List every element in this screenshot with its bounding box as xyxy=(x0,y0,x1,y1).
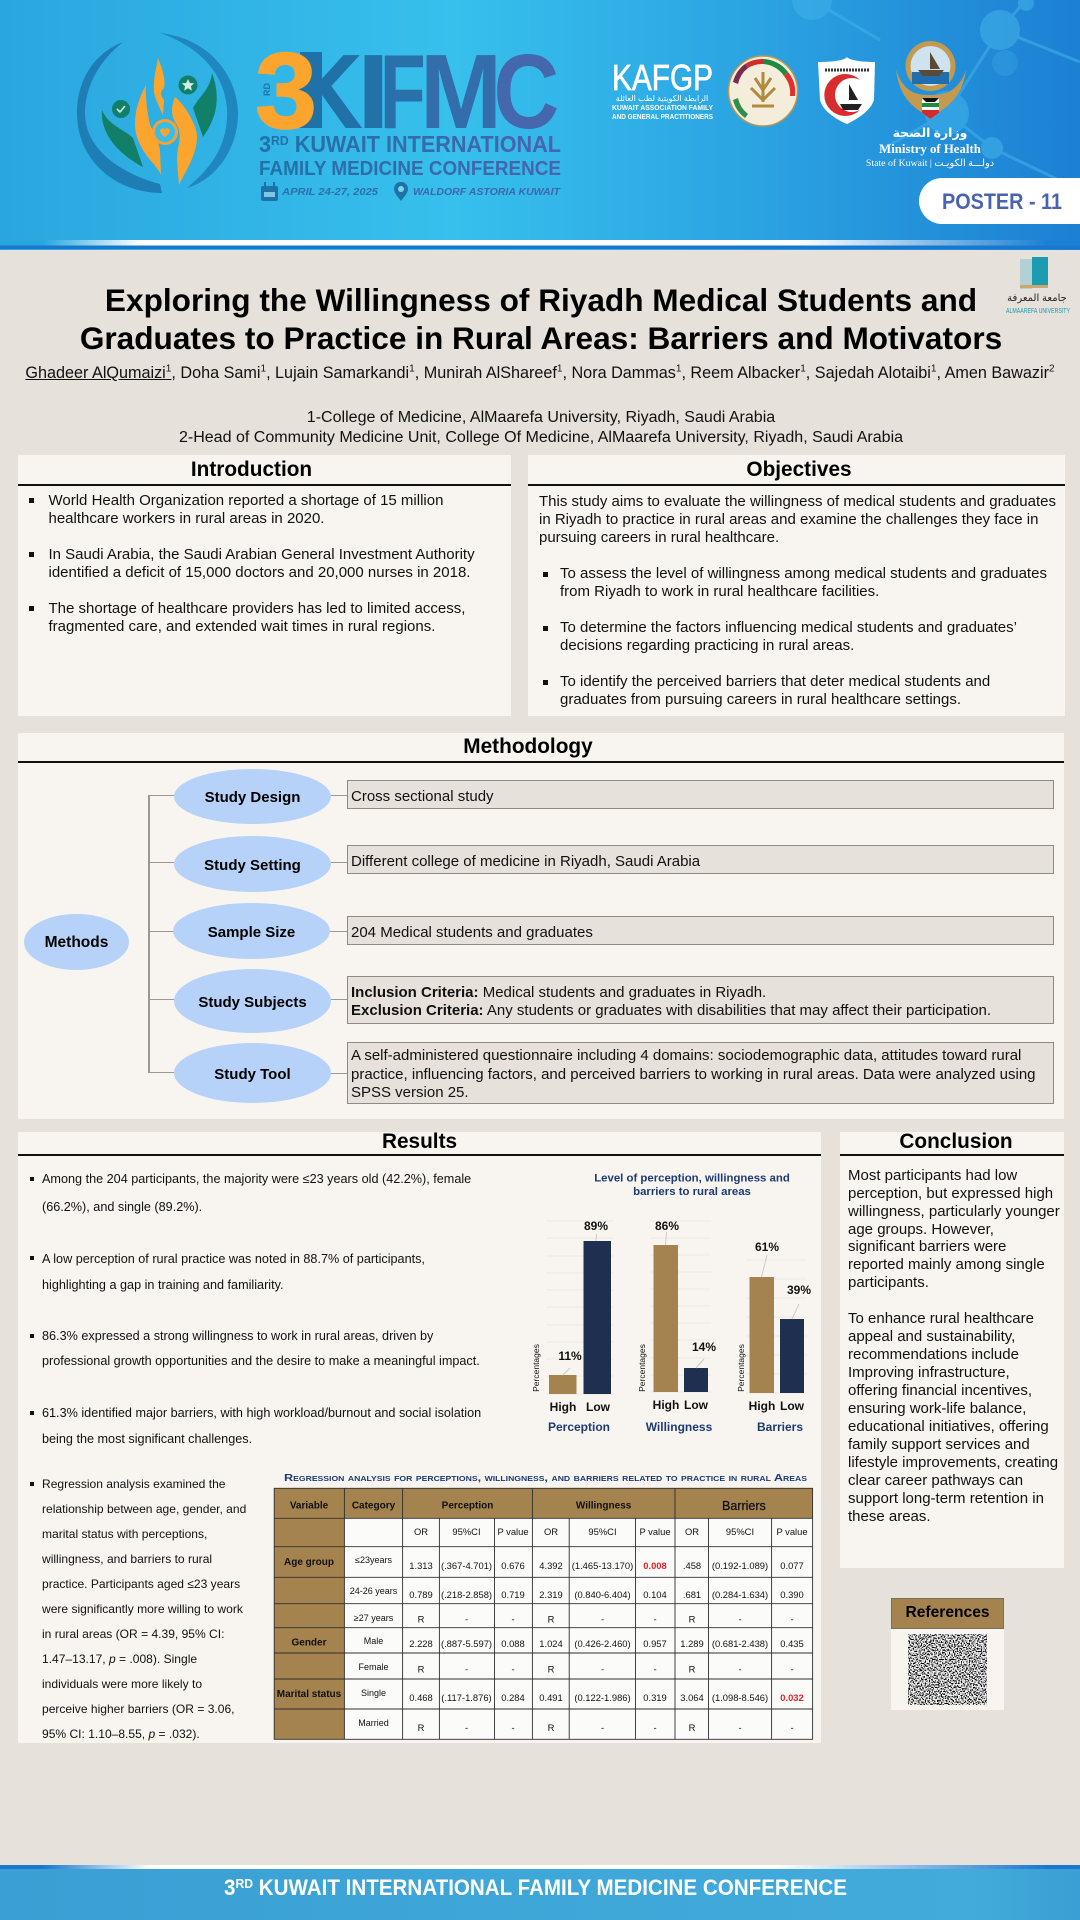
table values: (0.426-2.460) xyxy=(574,1638,631,1649)
table values: - xyxy=(601,1722,604,1733)
table values: 0.676 xyxy=(501,1560,525,1571)
node: study design: Study Design xyxy=(205,789,300,806)
text block: conclusion: family support services and xyxy=(848,1436,1030,1453)
box: study tool xyxy=(347,1042,1054,1104)
conference name xyxy=(259,131,561,180)
box: study design xyxy=(347,780,1054,809)
box: study subjects xyxy=(347,976,1054,1024)
text block: conclusion: educational initiatives, offering xyxy=(848,1418,1049,1435)
chart title: barriers to rural areas xyxy=(633,1186,751,1198)
bar chart: perception, willingness, barriers xyxy=(531,1172,811,1434)
table values: (.887-5.597) xyxy=(441,1638,492,1649)
row labels: Age group xyxy=(284,1557,334,1568)
table values: - xyxy=(601,1664,604,1674)
group: barriers bars: Percentages xyxy=(736,1344,746,1392)
network decoration xyxy=(792,0,1080,190)
table values: 0.468 xyxy=(409,1692,433,1703)
group: perception bars: High xyxy=(550,1400,576,1414)
node: study setting: Study Setting xyxy=(204,856,301,874)
node: study subjects xyxy=(174,969,331,1033)
category labels: ≤23years xyxy=(355,1555,392,1565)
text block: regression summary: in rural areas (OR = 4.39, 95% CI: xyxy=(42,1627,224,1641)
text block: objectives aim and bullets: To identify the perceived barriers that deter medical students and xyxy=(560,673,990,690)
table values: 95%CI xyxy=(588,1526,617,1537)
text block: introduction bullets: World Health Organization reported a shortage of 15 million xyxy=(48,492,443,508)
conference name: RD xyxy=(271,133,289,148)
conference logo mark xyxy=(77,33,238,193)
heading: introduction: Introduction xyxy=(191,458,312,481)
conference wordmark 3 KIFMC: C xyxy=(493,33,559,151)
table values: - xyxy=(511,1614,515,1624)
table values: - xyxy=(601,1614,604,1624)
group: willingness bars: Willingness xyxy=(646,1420,713,1434)
conference name: KUWAIT INTERNATIONAL xyxy=(289,131,561,157)
node: study design xyxy=(174,769,331,824)
table values: (.367-4.701) xyxy=(441,1560,492,1571)
KAFGP logo: KAFGP xyxy=(612,57,713,98)
text block: conclusion: participants. xyxy=(848,1274,929,1291)
text block: results bullets: 61.3% identified major barriers, with high workload/burnout and social isolation xyxy=(42,1406,481,1420)
circular society logo xyxy=(728,56,798,126)
text block: regression summary: willingness, and barriers to rural xyxy=(42,1552,212,1566)
footer title: RD xyxy=(235,1876,253,1891)
text block: introduction bullets: healthcare workers in rural areas in 2020. xyxy=(48,510,324,526)
authors: Ghadeer AlQumaizi1, Doha Sami1, Lujain Samarkandi1, Munirah AlShareef1, Nora Dammas1, Reem Albacker1, Sajedah Alotaibi1, Amen Bawazir2 xyxy=(25,364,1055,382)
node: study tool xyxy=(174,1043,331,1103)
table values: 1.289 xyxy=(680,1638,704,1649)
text block: conclusion: To enhance rural healthcare xyxy=(848,1310,1034,1327)
table values: R xyxy=(418,1664,425,1674)
text block: conclusion: lifestyle improvements, creating xyxy=(848,1454,1058,1471)
table values: R xyxy=(689,1664,696,1674)
text block: introduction bullets: identified a deficit of 15,000 doctors and 20,000 nurses in 2018. xyxy=(48,564,470,580)
group: willingness bars: High xyxy=(653,1398,679,1412)
table values: 0.284 xyxy=(501,1692,525,1703)
table values: 95%CI xyxy=(726,1526,754,1537)
table values: R xyxy=(548,1722,555,1733)
node: study setting xyxy=(174,836,331,892)
table values: (1.098-8.546) xyxy=(712,1692,768,1703)
table values: R xyxy=(689,1722,696,1733)
text block: results bullets: being the most significant challenges. xyxy=(42,1432,252,1446)
table values: .681 xyxy=(683,1589,701,1600)
table values: - xyxy=(653,1664,657,1674)
heading: references: References xyxy=(905,1604,990,1621)
table values: R xyxy=(418,1722,425,1733)
panel: conclusion xyxy=(840,1132,1064,1568)
conference wordmark 3 KIFMC: I xyxy=(356,33,390,151)
table values: - xyxy=(738,1614,742,1624)
text block: regression summary: relationship between age, gender, and xyxy=(42,1502,246,1516)
university logo xyxy=(1006,257,1070,315)
text block: conclusion: willingness, particularly younger xyxy=(848,1203,1060,1220)
group: barriers bars: 61% xyxy=(755,1240,779,1254)
table values: R xyxy=(689,1614,696,1624)
group: perception bars: Percentages xyxy=(531,1344,541,1392)
table values: P value xyxy=(776,1526,808,1537)
table values: OR xyxy=(414,1526,428,1537)
heading: results: Results xyxy=(382,1130,457,1153)
table values: 0.032 xyxy=(780,1692,804,1703)
conference wordmark 3 KIFMC: RD xyxy=(262,83,272,96)
table values: 0.077 xyxy=(780,1560,804,1571)
text block: objectives aim and bullets: from Riyadh to work in rural healthcare facilities. xyxy=(560,583,879,600)
title: Exploring the Willingness of Riyadh Medical Students and xyxy=(105,282,977,318)
poster number pill xyxy=(919,178,1080,224)
group: perception bars: Low xyxy=(586,1400,611,1414)
group: willingness bars: Low xyxy=(684,1398,709,1412)
icon: QR code xyxy=(908,1634,987,1705)
table values: - xyxy=(511,1664,515,1674)
table header: Barriers xyxy=(722,1499,766,1513)
node: methods xyxy=(24,914,129,970)
table values: 2.319 xyxy=(539,1589,563,1600)
group: perception bars: Perception xyxy=(548,1420,610,1434)
table values: 0.104 xyxy=(643,1589,667,1600)
box: study subjects: Inclusion Criteria: Medical students and graduates in Riyadh. xyxy=(351,984,766,1000)
table values: (1.465-13.170) xyxy=(572,1560,633,1571)
table values: 0.008 xyxy=(643,1560,667,1571)
node: study subjects: Study Subjects xyxy=(198,994,307,1010)
table values: 1.024 xyxy=(539,1638,563,1649)
ministry of health text: State of Kuwait | دولـــة الكويـت xyxy=(866,158,994,169)
ministry of health text: Ministry of Health xyxy=(879,142,981,156)
affiliations: 1-College of Medicine, AlMaarefa University, Riyadh, Saudi Arabia xyxy=(307,408,775,426)
regression table xyxy=(274,1473,814,1740)
row labels: Gender xyxy=(291,1638,327,1648)
table values: - xyxy=(653,1722,657,1733)
table values: (.117-1.876) xyxy=(441,1692,492,1703)
node: sample size: Sample Size xyxy=(208,924,295,940)
group: barriers bars: High xyxy=(749,1399,775,1413)
text block: results bullets xyxy=(30,1172,481,1446)
table values: - xyxy=(511,1722,515,1733)
table values: P value xyxy=(497,1526,529,1537)
table header: Willingness xyxy=(576,1500,632,1512)
table values: - xyxy=(790,1614,794,1624)
table values: 1.313 xyxy=(409,1560,433,1571)
text block: results bullets: 86.3% expressed a strong willingness to work in rural areas, driven by xyxy=(42,1329,433,1343)
text block: conclusion: ensuring work-life balance, xyxy=(848,1400,1026,1417)
heading: references xyxy=(891,1598,1004,1629)
table values: 2.228 xyxy=(409,1638,433,1649)
table values: (.218-2.858) xyxy=(441,1589,492,1600)
text block: results bullets: Among the 204 participants, the majority were ≤23 years old (42.2%), female xyxy=(42,1172,471,1186)
table values: R xyxy=(548,1664,555,1674)
table header: Variable xyxy=(290,1500,329,1512)
text block: introduction bullets: The shortage of healthcare providers has led to limited access, xyxy=(48,600,465,616)
KAFGP logo: AND GENERAL PRACTITIONERS xyxy=(612,112,713,121)
box: study tool: A self-administered questionnaire including 4 domains: sociodemographic data, attitudes toward rural xyxy=(351,1047,1021,1064)
box: sample size: 204 Medical students and graduates xyxy=(351,924,593,941)
text block: objectives aim and bullets: decisions regarding practicing in rural areas. xyxy=(560,637,854,654)
table values: - xyxy=(465,1722,468,1733)
box: study design: Cross sectional study xyxy=(351,788,494,804)
table values: - xyxy=(738,1664,742,1674)
category labels: Married xyxy=(358,1718,389,1728)
category labels: Female xyxy=(358,1662,389,1672)
affiliations: 2-Head of Community Medicine Unit, College Of Medicine, AlMaarefa University, Riyadh, Saudi Arabia xyxy=(179,428,903,446)
text block: introduction bullets: In Saudi Arabia, the Saudi Arabian General Investment Authority xyxy=(48,546,475,562)
text block: objectives aim and bullets: This study aims to evaluate the willingness of medical students and graduates xyxy=(539,493,1056,510)
table values: 3.064 xyxy=(680,1692,704,1703)
table values: - xyxy=(465,1664,468,1674)
conference name: FAMILY MEDICINE CONFERENCE xyxy=(259,158,561,180)
text block: regression summary: individuals were more likely to xyxy=(42,1677,202,1691)
table values: - xyxy=(465,1614,468,1624)
panel: methodology xyxy=(18,733,1064,1119)
table values: 0.491 xyxy=(539,1692,563,1703)
table values: - xyxy=(738,1722,742,1733)
table values: - xyxy=(790,1722,794,1733)
conference wordmark 3 KIFMC: 3 xyxy=(255,30,317,151)
text block: results bullets: professional growth opportunities and the desire to make a meaningful impact. xyxy=(42,1354,480,1368)
conference wordmark 3 KIFMC: F xyxy=(380,33,426,151)
table values: (0.284-1.634) xyxy=(712,1589,768,1600)
box: sample size xyxy=(347,916,1054,945)
footer title: 3 xyxy=(224,1875,236,1900)
title xyxy=(80,282,1002,356)
heading: conclusion: Conclusion xyxy=(899,1130,1013,1153)
text block: conclusion xyxy=(848,1167,1060,1525)
text block: regression summary xyxy=(30,1477,246,1741)
Kuwait emblem xyxy=(896,41,966,119)
text block: results bullets: A low perception of rural practice was noted in 88.7% of participants, xyxy=(42,1252,425,1266)
group: willingness bars: Percentages xyxy=(637,1344,647,1392)
table values: P value xyxy=(639,1526,671,1537)
group: willingness bars xyxy=(637,1219,716,1434)
table values: 0.789 xyxy=(409,1589,433,1600)
text block: conclusion: reported mainly among single xyxy=(848,1256,1045,1273)
table values: (0.122-1.986) xyxy=(574,1692,631,1703)
header banner xyxy=(0,0,1080,250)
text block: introduction bullets xyxy=(29,492,475,634)
text block: conclusion: support long-term retention in xyxy=(848,1490,1044,1507)
table values: R xyxy=(548,1614,555,1624)
footer banner xyxy=(0,1865,1080,1920)
text block: results bullets: highlighting a gap in training and familiarity. xyxy=(42,1278,284,1292)
conference wordmark 3 KIFMC: M xyxy=(420,33,502,151)
date and venue xyxy=(261,182,562,201)
text block: regression summary: marital status with perceptions, xyxy=(42,1527,207,1541)
group: barriers bars: Low xyxy=(780,1399,805,1413)
ministry of health text xyxy=(866,126,994,169)
node: methods: Methods xyxy=(45,934,108,951)
text block: regression summary: Regression analysis examined the xyxy=(42,1477,225,1491)
table values xyxy=(409,1526,808,1733)
group: perception bars: 89% xyxy=(584,1219,608,1233)
table title: Regression analysis for perceptions, willingness, and barriers related to practice in rural Areas xyxy=(284,1473,807,1484)
text block: regression summary: 95% CI: 1.10–8.55, p = .032). xyxy=(42,1727,200,1741)
row labels xyxy=(277,1557,342,1700)
ministry of health text: وزارة الصحة xyxy=(893,126,967,140)
group: willingness bars: 86% xyxy=(655,1219,679,1233)
conference name: 3 xyxy=(259,131,272,157)
text block: regression summary: 1.47–13.17, p = .008). Single xyxy=(42,1652,197,1666)
category labels: Male xyxy=(364,1636,383,1646)
poster number pill: POSTER - 11 xyxy=(942,189,1062,214)
category labels: Single xyxy=(361,1688,386,1698)
group: barriers bars: Barriers xyxy=(757,1420,803,1434)
KAFGP logo: الرابطة الكويتية لطب العائلة xyxy=(616,94,708,103)
node: study tool: Study Tool xyxy=(214,1066,291,1082)
affiliations xyxy=(179,408,904,446)
table values: OR xyxy=(685,1526,699,1537)
category labels: 24-26 years xyxy=(350,1586,398,1596)
chart title: Level of perception, willingness and xyxy=(594,1172,790,1184)
group: perception bars xyxy=(531,1219,611,1434)
table values: 0.719 xyxy=(501,1589,525,1600)
text block: objectives aim and bullets: in Riyadh to practice in rural areas and examine the challenges they face in xyxy=(539,511,1038,528)
text block: conclusion: perception, but expressed high xyxy=(848,1185,1053,1202)
table values: - xyxy=(790,1664,794,1674)
text block: conclusion: Most participants had low xyxy=(848,1167,1017,1184)
table values: 95%CI xyxy=(452,1526,481,1537)
KAFGP logo xyxy=(612,57,713,121)
text block: regression summary: were significantly more willing to work xyxy=(42,1602,243,1616)
text block: objectives aim and bullets xyxy=(539,493,1056,708)
text block: conclusion: offering financial incentives, xyxy=(848,1382,1032,1399)
text block: conclusion: significant barriers were xyxy=(848,1238,1006,1255)
text block: objectives aim and bullets: graduates from pursuing careers in rural healthcare settings. xyxy=(560,691,961,708)
box: study tool: SPSS version 25. xyxy=(351,1084,469,1101)
text block: objectives aim and bullets: To assess the level of willingness among medical students and graduates xyxy=(560,565,1047,582)
row labels: Marital status xyxy=(277,1689,342,1700)
table values: R xyxy=(418,1614,425,1624)
panel: introduction xyxy=(18,455,511,716)
table values: 4.392 xyxy=(539,1560,563,1571)
table values: 0.957 xyxy=(643,1638,667,1649)
heading: methodology: Methodology xyxy=(463,735,593,758)
date and venue: APRIL 24-27, 2025 xyxy=(281,186,378,198)
text block: regression summary: perceive higher barriers (OR = 3.06, xyxy=(42,1702,235,1716)
group: willingness bars: 14% xyxy=(692,1340,716,1354)
box: study tool: practice, influencing factors, and perceived barriers to working in rural areas. Data were analyzed using xyxy=(351,1066,1036,1082)
box: study setting: Different college of medicine in Riyadh, Saudi Arabia xyxy=(351,853,700,870)
group: barriers bars xyxy=(736,1240,811,1434)
table values: (0.192-1.089) xyxy=(712,1560,768,1571)
date and venue: WALDORF ASTORIA KUWAIT xyxy=(413,186,562,198)
group: perception bars: 11% xyxy=(558,1349,582,1363)
table header xyxy=(290,1499,766,1513)
box: study subjects: Exclusion Criteria: Any students or graduates with disabilities that may affect their participation. xyxy=(351,1002,991,1018)
text block: introduction bullets: fragmented care, and extended wait times in rural regions. xyxy=(48,618,435,634)
category labels xyxy=(350,1555,398,1728)
table header: Perception xyxy=(442,1500,493,1512)
table values: 0.319 xyxy=(643,1692,667,1703)
table values: .458 xyxy=(683,1560,701,1571)
table header: Category xyxy=(352,1500,396,1512)
top strip xyxy=(0,240,1080,246)
category labels: ≥27 years xyxy=(354,1613,394,1623)
table values: 0.435 xyxy=(780,1638,804,1649)
table values: (0.681-2.438) xyxy=(712,1638,768,1649)
conference wordmark 3 KIFMC: K xyxy=(293,33,363,151)
text block: conclusion: Improving infrastructure, xyxy=(848,1364,1010,1381)
text block: conclusion: age groups. However, xyxy=(848,1221,994,1238)
methods diagram xyxy=(24,769,1054,1104)
panel: results xyxy=(18,1132,821,1743)
text block: conclusion: appeal and sustainability, xyxy=(848,1328,1015,1345)
text block: results bullets: (66.2%), and single (89.2%). xyxy=(42,1200,202,1214)
KAFGP logo: KUWAIT ASSOCIATION FAMILY xyxy=(612,103,713,112)
table values: - xyxy=(653,1614,657,1624)
conference wordmark 3 KIFMC xyxy=(255,30,559,151)
text block: conclusion: clear career pathways can xyxy=(848,1472,1023,1489)
text block: regression summary: practice. Participants aged ≤23 years xyxy=(42,1577,240,1591)
table values: 0.390 xyxy=(780,1589,804,1600)
shield logo xyxy=(818,57,875,124)
chart title xyxy=(594,1172,790,1198)
panel: objectives xyxy=(528,455,1065,716)
table values: 0.088 xyxy=(501,1638,525,1649)
heading: objectives: Objectives xyxy=(746,458,852,481)
panel: references xyxy=(891,1598,1004,1710)
table values: OR xyxy=(544,1526,558,1537)
box: study setting xyxy=(347,845,1054,874)
text block: objectives aim and bullets: pursuing careers in rural healthcare. xyxy=(539,529,779,546)
university logo: جامعة المعرفة xyxy=(1007,293,1067,304)
text block: conclusion: recommendations include xyxy=(848,1346,1019,1363)
text block: conclusion: these areas. xyxy=(848,1508,931,1525)
footer title: KUWAIT INTERNATIONAL FAMILY MEDICINE CONFERENCE xyxy=(253,1875,847,1900)
group: barriers bars: 39% xyxy=(787,1283,811,1297)
text block: objectives aim and bullets: To determine the factors influencing medical students and graduates’ xyxy=(560,619,1017,636)
title: Graduates to Practice in Rural Areas: Barriers and Motivators xyxy=(80,320,1002,356)
node: sample size xyxy=(173,903,330,959)
table values: (0.840-6.404) xyxy=(574,1589,631,1600)
